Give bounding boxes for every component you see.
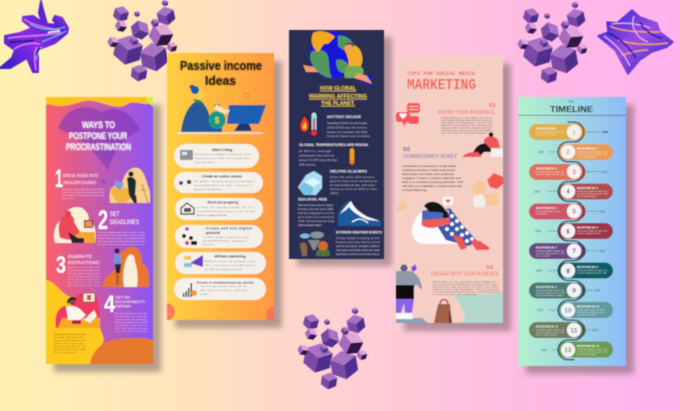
heading: Passive income [180, 58, 262, 73]
section 01: know your audience [438, 103, 496, 134]
section 02: consistency is key: 02 [403, 147, 410, 153]
section: extreme weather [300, 230, 382, 257]
purple cube cluster top right [516, 1, 588, 84]
year labels: 2025 [541, 348, 548, 352]
card: create an online course: Research and Markets. [194, 188, 222, 191]
heading: WAYS TO [82, 120, 115, 131]
card: affiliate marketing [175, 252, 266, 274]
step 1 text [55, 165, 104, 200]
milestone number badges: 3 [572, 169, 576, 176]
liquid metal shape left [0, 1, 68, 72]
illustration: person at laptop [100, 168, 150, 203]
section 01: know your audience: help you create content that resonates with them [441, 126, 492, 130]
section 02: consistency is key: marketing because it helps build brand [402, 168, 455, 172]
section 02: consistency is key: CONSISTENCY IS KEY [403, 154, 458, 160]
step 4 text: Share your goals with a friend [115, 321, 147, 324]
heading [180, 58, 262, 88]
card: create and sell digital products [175, 225, 263, 248]
section: extreme weather: heat waves and floods, which can cause [336, 249, 381, 252]
milestone 5: Lorem ipsum dolor sit amet, [536, 210, 560, 213]
milestone 2: sectetur adipiscing elit, sed [577, 153, 607, 156]
step 1 text: 1 [55, 165, 63, 193]
year labels: 2005 [536, 268, 543, 272]
section 03: engage with your audience: 03 [486, 265, 493, 271]
section 02: consistency is key: stick to a consistent posting schedule. This [402, 180, 464, 184]
step 3 text: distract you from your task. [68, 269, 100, 272]
section 03: engage with your audience: trust and loyalty with your audience, and ultimately lead [433, 290, 500, 294]
milestone 9: do eiusmod tempor incididunt. [536, 294, 564, 297]
milestone 7 [529, 243, 586, 259]
step 4 text: or coworker, and check in [115, 324, 147, 327]
panel: social media marketing [396, 56, 503, 323]
card: start a blog: those that don't. [195, 161, 215, 164]
milestone 6: MILESTONE NO. 6 [577, 226, 598, 230]
step 3 text: quiet place in which you [68, 278, 100, 281]
year labels: 1980 [599, 249, 606, 253]
section 03: engage with your audience: ENGAGE WITH YOUR AUDIENCE [431, 272, 500, 278]
milestone 11: do eiusmod tempor. [536, 334, 558, 336]
section: melting glaciers: an unprecedented rate, with some [330, 184, 376, 187]
step 1 text: can easily see what needs to be done first [62, 194, 104, 197]
heading: PROCRASTINATION [66, 142, 131, 153]
closing note: steps and you will see more [54, 339, 86, 342]
milestone 12 [558, 342, 613, 358]
milestone 1: sectetur elit, diam. [536, 133, 556, 136]
section 03: engage with your audience: to increased sales and conversions. [433, 293, 478, 296]
illustration: woman with money bag and computer [177, 85, 266, 134]
milestone 8: MILESTONE NO. 8 [577, 266, 598, 269]
section 01: know your audience: social media marketing. Take the time to research [441, 119, 492, 122]
step 1 text: chunks so you feel less overwhelmed and [62, 191, 104, 194]
section: melting glaciers: losing as much as 80% of their [330, 188, 377, 191]
step 3 text [56, 252, 101, 287]
milestone 2: do eiusmod tempor. [577, 156, 597, 158]
section 01: know your audience: and improve the chances that they will engage, [441, 129, 492, 132]
purple cube cluster bottom centre [296, 307, 368, 390]
panel: global warming [289, 30, 384, 259]
section 03: engage with your audience: content to encourage engagement. This will help build [433, 288, 499, 291]
milestone 12: Lorem ipsum dolor sit amet, con [577, 348, 607, 351]
card: create and sell digital products: In 2021, global e-commerce sales [203, 236, 249, 239]
section: hottest decade: being the hottest year on record. [327, 135, 370, 138]
section: melting glaciers: volume. [330, 192, 339, 195]
milestone 4: do eiusmod tempor. [577, 195, 597, 198]
step 3 text: unused tabs, and find a [68, 275, 101, 278]
card: rent out property: Rent out property [208, 200, 239, 204]
year labels: 2010 [594, 288, 601, 292]
milestone 11: Lorem ipsum dolor sit amet, con [536, 328, 564, 332]
card: affiliate marketing: Affiliate marketing spending in the [205, 260, 256, 263]
illustration: woman reading on beanbag [412, 197, 490, 250]
section: sea level rise [298, 198, 381, 227]
heading [66, 120, 131, 153]
step 2 text: SET [110, 212, 120, 218]
heading: WARMING AFFECTING [309, 94, 367, 100]
heading: TASK [568, 100, 574, 104]
milestone 4 [558, 184, 613, 200]
card: create and sell digital products: Create and sell digital [206, 226, 252, 230]
milestone number badges: 1 [572, 129, 576, 136]
milestone number badges [561, 125, 581, 357]
step 3 text: 3 [56, 252, 66, 279]
card: rent out property [175, 198, 263, 220]
illustration: distracted people [102, 247, 149, 287]
card: rent out property: one-bedroom apartment in the US was [197, 210, 255, 213]
card: affiliate marketing: US is expected to reach $8.2 billion [205, 264, 256, 267]
step 2 text: your work on time and makes it easier to plan [98, 234, 145, 237]
milestone 7: do eiusmod. [536, 256, 550, 258]
section 03: engage with your audience: Social media is a two-way conversation. Engage with [433, 280, 496, 284]
step 2 text [98, 205, 145, 246]
milestone 12: sectetur adipiscing elit, sed [577, 350, 607, 354]
step 2 text: DEADLINES [110, 220, 139, 226]
milestone number badges: 6 [566, 228, 570, 235]
milestone 10: sed do eiusmod. [577, 314, 597, 316]
section: global temperatures: GLOBAL TEMPERATURES ARE RISING [299, 143, 368, 147]
illustration: woman with money bag and computer: $ [215, 116, 220, 125]
milestone number badges: 9 [572, 288, 576, 295]
milestone 6: Lorem ipsum dolor sit amet, con [577, 230, 607, 232]
card: create and sell digital products: products [206, 231, 220, 235]
section: sea level rise: SEA LEVEL RISE [298, 198, 328, 202]
milestone 1: Lorem ipsum dolor sit amet, con [536, 130, 564, 134]
panel: passive income ideas [166, 52, 275, 321]
section 01: know your audience: behaviors of your audience. This information will [441, 124, 493, 127]
milestone 9: sectetur adipiscing elit, sed [536, 292, 564, 294]
section 01: know your audience: Understanding your target audience is crucial in [441, 116, 492, 120]
step 4 text: can see your progress. [115, 330, 147, 333]
section: sea level rise: Sea levels have risen by about [298, 204, 333, 207]
step 3 text: DISTRACTIONS: [68, 260, 100, 266]
step 4 text: GET AN [115, 296, 130, 300]
card: rent out property: In 2021, the average monthly rent for a [197, 206, 256, 209]
heading: POSTPONE YOUR [69, 131, 127, 142]
step 4 text: with them regularly so you [115, 327, 147, 330]
year labels: 1907 [538, 150, 545, 154]
heading: TIPS FOR SOCIAL MEDIA [407, 70, 476, 77]
step 1 text: BREAK TASKS INTO [63, 173, 98, 178]
section 01: know your audience: and analyze the demographics, interests, and [441, 122, 492, 124]
card: create an online course [174, 172, 263, 193]
milestone 4: MILESTONE NO. 4 [577, 187, 598, 190]
milestone 11: MILESTONE NO. 11 [536, 326, 559, 328]
section: extreme weather: EXTREME WEATHER EVENTS [336, 230, 382, 234]
illustration: people hugging the globe [303, 31, 372, 85]
heading: WAYS TO [82, 120, 115, 131]
timeline connector [558, 122, 584, 360]
section 02: consistency is key: awareness and keeps your audience [402, 172, 454, 176]
section 02: consistency is key [402, 147, 464, 192]
milestone 8: Lorem ipsum dolor sit amet, con [577, 269, 607, 272]
milestone 5: MILESTONE NO. 5 [536, 207, 557, 210]
milestone 5 [529, 204, 586, 220]
year labels: 2015 [537, 308, 544, 312]
section: sea level rise: areas and island nations. [298, 224, 322, 227]
section 03: engage with your audience: and mentions. Ask questions, run polls, and create [433, 286, 499, 288]
card: create an online course: The global e-learning market is projected to [194, 180, 255, 183]
milestone 9 [529, 282, 586, 298]
purple cube cluster top left [106, 0, 178, 82]
year labels: 1940 [599, 210, 606, 214]
milestone 12: do eiusmod tempor. [577, 353, 597, 356]
milestone 10: consectetur adipiscing elit, [577, 311, 605, 314]
milestone number badges: 10 [564, 308, 572, 314]
section 02: consistency is key: Consistency is important in social media [402, 164, 456, 168]
section: melting glaciers [298, 170, 377, 195]
step 4 text: ACCOUNTABILITY [115, 300, 146, 304]
closing note: Be kind to yourself and start [54, 345, 86, 348]
section 02: consistency is key: a loyal following. [402, 188, 427, 192]
section: hottest decade: According to NASA, the last decade [327, 122, 368, 125]
step 3 text: Put your phone away, close [68, 272, 100, 275]
heading: POSTPONE YOUR [69, 131, 127, 142]
year labels [534, 130, 609, 352]
milestone 7: Lorem ipsum dolor sit amet, con [536, 250, 564, 252]
milestone 10: Lorem ipsum dolor sit amet, [577, 308, 605, 312]
card: start a blog: According to HubSpot, businesses that [195, 153, 250, 156]
heading: Ideas [205, 73, 236, 88]
illustration: person with laptop [462, 132, 503, 157]
step 3 text: Remove the things that [68, 266, 100, 269]
milestone number badges: 12 [564, 347, 572, 354]
milestone 5: consectetur. [536, 212, 548, 216]
year labels: 1920 [534, 190, 541, 194]
step 3 text: that matters right now. [68, 284, 100, 287]
milestone number badges: 8 [566, 268, 570, 275]
icon: small peach tag [396, 197, 408, 211]
step 1 text: and next. [62, 197, 76, 200]
year labels: 1910 [601, 170, 608, 174]
card: affiliate marketing: by 2022, according to Statista. [205, 268, 243, 271]
illustration: person at desk [54, 207, 96, 243]
card: start a blog: blog generate 126% more leads than [195, 157, 251, 160]
heading [407, 70, 476, 94]
section: extreme weather: frequent and more intense events [336, 241, 381, 244]
section: melting glaciers: glaciers have been retreating at [330, 180, 377, 183]
panel shadows [54, 37, 634, 374]
milestone 7: sectetur adipiscing elit, sed [536, 252, 564, 255]
heading: THE PLANET. [321, 101, 356, 107]
section: sea level rise: 8 inches (21 cm) since 1880, [298, 208, 334, 211]
closing note: productivity in your day. [54, 342, 83, 345]
section: sea level rise: 2100, threatening low-lying [298, 220, 335, 223]
step 2 text: 2 [98, 205, 108, 235]
card: invest in dividend stocks [174, 278, 266, 300]
card: start a blog: Start a blog [212, 148, 232, 152]
step 3 text: can focus on the work [68, 281, 100, 284]
step 4 text [104, 291, 147, 333]
panel: ways to postpone procrastination [46, 97, 153, 364]
milestone number badges: 4 [566, 189, 570, 196]
card: start a blog [174, 144, 259, 168]
milestone 3: Lorem ipsum dolor sit amet, con [536, 170, 564, 174]
heading: PROCRASTINATION [66, 142, 131, 153]
heading: TIMELINE [550, 105, 594, 114]
step 1 text: SMALLER CHUNKS [63, 180, 96, 185]
milestone number badges: 5 [572, 208, 576, 216]
section 01: know your audience: 01 [489, 103, 496, 109]
section: hottest decade: HOTTEST DECADE [327, 115, 362, 119]
section: melting glaciers: MELTING GLACIERS [330, 170, 368, 174]
card: create an online course: reach $325 billion by 2025, according to [194, 184, 253, 187]
illustration: standing person [396, 264, 422, 319]
step 2 text: Setting a deadline gives you a reason to finish [98, 231, 145, 234]
step 2 text: and reward yourself after you meet each one [98, 240, 145, 243]
closing note [54, 333, 86, 354]
card: create and sell digital products: reached $4.28 trillion, according to [203, 240, 248, 242]
heading: Passive income [180, 58, 262, 73]
section 01: know your audience: KNOW YOUR AUDIENCE [438, 110, 496, 116]
section 01: know your audience: and create effective marketing campaigns. [441, 132, 487, 134]
milestone number badges: 11 [571, 327, 578, 334]
section: melting glaciers: Since the early 20th century, [330, 176, 375, 179]
section: extreme weather: Climate change is leading to more [336, 237, 381, 240]
heading: Ideas [205, 73, 236, 88]
heading: MARKETING [407, 77, 476, 94]
section: extreme weather: significant economic and human losses. [336, 253, 380, 256]
illustration: puzzle pieces [471, 173, 503, 207]
milestone 8: sectetur adipiscing elit, sed. [577, 272, 607, 274]
heading: HOW GLOBAL [320, 86, 356, 92]
card: rent out property: $1,225, according to RentCafe. [197, 214, 227, 217]
section: global temperatures: about 1°C (2°F) since the late [299, 158, 338, 162]
card: invest in dividend stocks: The average annual return for the [200, 285, 248, 288]
milestone 4: sectetur adipiscing elit, sed [577, 192, 607, 196]
section: global temperatures: 19th century. [299, 162, 316, 166]
section: extreme weather: such as hurricanes, droughts, wildfires, [336, 245, 380, 248]
milestone 10: MILESTONE NO. 10 [577, 306, 600, 308]
step 2 text: ahead. Break the project into small milestones [98, 237, 145, 240]
section: global temperatures: he Earth's average [299, 149, 332, 153]
milestone 8 [558, 262, 613, 278]
icon: chat bubbles with heart [396, 103, 420, 126]
milestone 6: sectetur adipiscing elit. [577, 232, 601, 235]
milestone 2 [558, 144, 613, 160]
section: hottest decade [300, 112, 370, 138]
card: invest in dividend stocks: 11.8%. [200, 294, 208, 296]
closing note: is normal. Take these little [54, 336, 84, 339]
section: global temperatures: temperature has risen by [299, 154, 335, 158]
milestone 3 [529, 164, 586, 180]
milestone 12: MILESTONE NO. 12 [577, 345, 600, 348]
milestone 7: MILESTONE NO. 7 [536, 246, 557, 250]
milestone 3: MILESTONE NO. 3 [536, 168, 557, 170]
year labels: 2020 [592, 328, 599, 332]
section: sea level rise: up to 8 feet (2.5 meters) by [298, 216, 335, 219]
card: affiliate marketing: Affiliate marketing [214, 254, 246, 258]
step 2 text: so you keep up your motivation. [98, 243, 145, 246]
card: invest in dividend stocks: Invest in dividend-paying stocks [197, 280, 254, 284]
section 02: consistency is key: will help you establish a routine and build [402, 184, 462, 188]
liquid metal shape right [598, 10, 673, 74]
section 02: consistency is key: engaged. Create a content calendar and [402, 176, 461, 180]
milestone 11: sectetur adipiscing elit, sed [536, 331, 564, 334]
milestone 3: sectetur adipiscing elit, sed [536, 173, 564, 176]
card: create an online course: Create an online course [202, 174, 242, 178]
panel: timeline [518, 97, 626, 366]
milestone 1: MILESTONE NO. 1 [536, 128, 557, 130]
section 03: engage with your audience: your audience by responding to comments, messages, [433, 283, 499, 286]
illustration: shopping bag [434, 300, 452, 323]
milestone 9: MILESTONE NO. 9 [536, 286, 557, 289]
heading [518, 100, 626, 116]
milestone 4: Lorem ipsum dolor sit amet, con [577, 190, 607, 193]
milestone 9: Lorem ipsum dolor sit amet, con [536, 289, 564, 292]
illustration: accountability partner [55, 293, 100, 328]
section: sea level rise: and are projected to rise by [298, 212, 335, 215]
milestone 11 [529, 322, 586, 338]
step 1 text: Break your larger tasks down into smaller [62, 188, 104, 191]
closing note: with one small task today, [54, 348, 86, 351]
milestone 2: Lorem ipsum dolor sit amet, con [577, 150, 607, 154]
year labels: 1900 [602, 130, 609, 134]
section: hottest decade: (2010-2019) was the hottest [327, 126, 367, 130]
year connectors [547, 132, 601, 350]
milestone 1 [529, 124, 586, 140]
year labels: 1960 [535, 229, 542, 233]
section: global temperatures [299, 143, 368, 166]
milestone 6 [558, 223, 613, 239]
heading [309, 86, 367, 107]
step 4 text: stay on track and motivated. [115, 318, 147, 321]
section 03: engage with your audience [431, 265, 500, 296]
step 4 text: Having someone to hold you [115, 312, 147, 315]
closing note: Remember that procrastination [54, 333, 86, 336]
step 4 text: PARTNER [115, 304, 131, 308]
step 3 text: ELIMINATE [68, 254, 92, 260]
card: invest in dividend stocks: S&P 500 from 1926 to 2020 was [200, 289, 247, 292]
section: hottest decade: decade ever recorded, with 2016 [327, 131, 368, 134]
card: create and sell digital products: Shopify. [203, 244, 215, 246]
step 4 text: accountable can help you [115, 315, 147, 318]
milestone number badges: 7 [572, 248, 576, 255]
step 4 text: 4 [104, 291, 116, 318]
milestone 10 [558, 302, 613, 318]
milestone number badges: 2 [566, 149, 570, 156]
milestone 2: MILESTONE NO. 2 [577, 148, 598, 150]
closing note: then keep going. [54, 351, 76, 354]
